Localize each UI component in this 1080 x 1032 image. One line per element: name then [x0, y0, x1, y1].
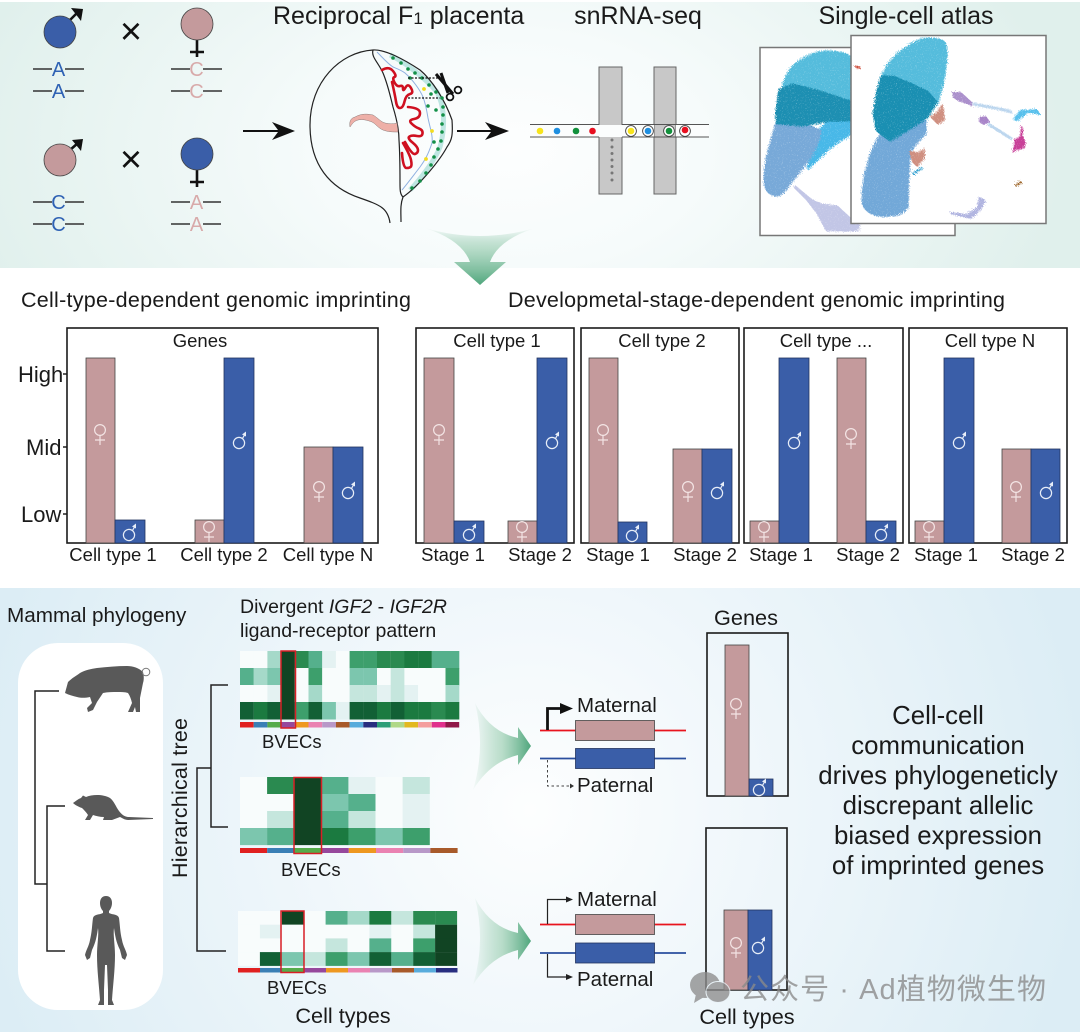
heatmap: mouse [240, 777, 458, 880]
allele lines C blue: C [51, 214, 66, 236]
cluster: sky [1013, 109, 1041, 121]
UMAP frame front [851, 36, 1046, 224]
chart: stage panel cell type N: Stage 1 [914, 544, 978, 565]
icon: chat bubbles [690, 972, 730, 1003]
arrow: paternal expression [548, 954, 567, 977]
cell type colour bar [240, 722, 459, 728]
icon: cross symbol 1: × [120, 11, 142, 53]
icon: scissors [436, 73, 461, 100]
arrow: maternal expression [548, 900, 567, 924]
icon: female pink [181, 8, 213, 57]
icon: cross symbol 2: × [120, 139, 142, 181]
cluster: lower blue [863, 120, 925, 215]
chart: cell-type-dependent bars: Cell type 2 [180, 544, 268, 565]
chart: stage panel cell type ... [744, 328, 903, 565]
cluster: teal [874, 77, 936, 140]
arrow: crosses to placenta [243, 122, 295, 140]
BVEC highlight [294, 778, 322, 854]
allele lines C blue [33, 192, 84, 236]
watermark: 公众号 · Ad植物微生物 [740, 973, 1046, 1006]
BVEC highlight [281, 911, 304, 972]
cluster: salmon upper [930, 103, 945, 125]
gene model: maternal biased: Maternal [577, 694, 657, 717]
icon: pig [65, 666, 150, 712]
cluster: magenta [1012, 126, 1026, 153]
chart: stage panel cell type N: Stage 2 [1001, 544, 1065, 565]
dotted biopsy region [408, 78, 440, 98]
cluster: light blue top [881, 39, 946, 103]
cluster: salmon lower [909, 148, 925, 167]
allele lines C blue: C [51, 192, 66, 214]
gene model: biallelic: Maternal [577, 888, 657, 911]
chart: stage panel cell type 1 [416, 328, 574, 565]
allele lines A [33, 59, 84, 103]
heading: divergent ligand-receptor pattern: Divergent IGF2 - IGF2R [240, 596, 447, 618]
panel: bottom phylogeny background [0, 588, 1080, 1032]
heading: snRNA-seq: snRNA-seq [574, 2, 702, 30]
chart: stage panel cell type 2: Stage 2 [673, 544, 737, 565]
allele lines A pink: A [190, 192, 204, 214]
icon: human [85, 896, 127, 1005]
cluster: small blue [912, 167, 923, 175]
chart: stage panel cell type N: Cell type N [945, 330, 1035, 351]
band: light teal along placenta edge [390, 55, 444, 190]
umbilical cord [350, 114, 398, 132]
heatmap: pig [240, 651, 459, 752]
label: BVECs 3: BVECs [267, 977, 327, 998]
cluster: purple [979, 116, 990, 125]
cell type colour bar [240, 848, 458, 853]
allele lines C: C [189, 59, 204, 81]
chart: maternal biased gene [707, 633, 788, 796]
arrow: lower gradient [473, 898, 531, 985]
axis labels [18, 362, 63, 527]
chart: cell-type-dependent bars: Genes [173, 330, 227, 351]
snRNA-seq microfluidics diagram [530, 67, 709, 194]
cross 2: male C and female A [33, 138, 221, 236]
arrow: placenta to snRNA-seq [457, 122, 509, 140]
arrow: strong maternal expression [548, 708, 562, 730]
heading: divergent ligand-receptor pattern: ligand-receptor pattern [240, 620, 436, 642]
yellow dots [422, 87, 434, 161]
arrow: weak paternal expression [548, 760, 570, 786]
icon: male pink [44, 139, 83, 176]
summary text: biased expression [834, 822, 1042, 850]
summary text: Cell-cell [892, 702, 984, 730]
cross 1: male A and female C [33, 8, 222, 103]
chart: stage panel cell type ...: Stage 1 [749, 544, 813, 565]
label: cell types left: Cell types [295, 1003, 391, 1028]
cluster: lavender arc [950, 197, 986, 219]
heatmap: human [238, 911, 458, 998]
summary text: of imprinted genes [832, 852, 1044, 880]
heading: mammal phylogeny: Mammal phylogeny [7, 604, 187, 627]
chart: stage panel cell type 2 [581, 328, 739, 565]
chart: cell-type-dependent bars: Cell type N [283, 544, 373, 565]
chart: cell-type-dependent bars [18, 328, 378, 565]
chart: stage panel cell type 1: Cell type 1 [453, 330, 541, 351]
chart: stage panel cell type N [909, 328, 1067, 565]
label: hierarchical tree: Hierarchical tree [168, 718, 192, 878]
label: cell types right: Cell types [699, 1004, 795, 1029]
barcode beads [610, 138, 614, 182]
heading: cell-type-dependent: Cell-type-dependent genomic imprinting [21, 288, 411, 312]
trails [973, 104, 1012, 139]
heading: reciprocal F1 placenta: Reciprocal F1 placenta [273, 2, 524, 30]
chart: stage panel cell type ...: Stage 2 [836, 544, 900, 565]
red villi vessels [382, 68, 423, 168]
icon: mouse [73, 795, 153, 820]
allele lines C [171, 59, 222, 103]
gene model: maternal biased [540, 694, 686, 797]
icon: male blue [44, 8, 83, 48]
UMAP frame back [760, 48, 955, 236]
heading: developmental-stage-dependent: Developmetal-stage-dependent genomic imprinting [508, 288, 1005, 312]
chart: stage panel cell type 2: Stage 1 [586, 544, 650, 565]
hierarchical tree lines [197, 685, 228, 951]
chart: stage panel cell type 1: Stage 1 [421, 544, 485, 565]
allele lines A pink: A [190, 214, 204, 236]
panel: species phylogeny [18, 643, 163, 1010]
green dots [391, 56, 445, 190]
chart: biallelic gene [706, 828, 787, 990]
axis labels: Low [21, 502, 61, 527]
axis labels: Mid [26, 435, 61, 460]
allele lines A: A [52, 81, 66, 103]
chart: stage panel cell type 2: Cell type 2 [618, 330, 706, 351]
gene model: biallelic [540, 888, 686, 991]
heading: single-cell atlas: Single-cell atlas [818, 2, 994, 30]
icon: female blue [181, 138, 213, 187]
arrow: upper gradient [473, 703, 531, 790]
phylogeny tree [35, 691, 65, 951]
droplets [537, 128, 596, 134]
chart: stage panel cell type 1: Stage 2 [508, 544, 572, 565]
cluster: small red [855, 66, 860, 69]
summary text: communication [851, 732, 1025, 760]
barcoded droplets [626, 126, 690, 136]
cluster: lilac upper [952, 92, 973, 106]
allele lines A pink [171, 192, 221, 236]
label: BVECs 2: BVECs [281, 859, 341, 880]
arrow: down gradient [425, 228, 535, 285]
chart: stage panel cell type ...: Cell type ... [780, 330, 872, 351]
BVEC highlight [281, 651, 296, 728]
label: BVECs 1: BVECs [262, 731, 322, 752]
allele lines A: A [52, 59, 66, 81]
chart: cell-type-dependent bars: Cell type 1 [69, 544, 157, 565]
axis labels: High [18, 362, 63, 387]
cell type colour bar [238, 968, 458, 972]
gene model: maternal biased: Paternal [577, 774, 653, 797]
cluster: brown [1015, 180, 1022, 187]
placenta illustration [310, 50, 461, 223]
panel: top workflow background [0, 2, 1080, 268]
allele lines C: C [189, 81, 204, 103]
summary text: drives phylogeneticly [818, 762, 1058, 790]
summary text: discrepant allelic [843, 792, 1033, 820]
heading: genes: Genes [714, 605, 778, 630]
gene model: biallelic: Paternal [577, 968, 653, 991]
